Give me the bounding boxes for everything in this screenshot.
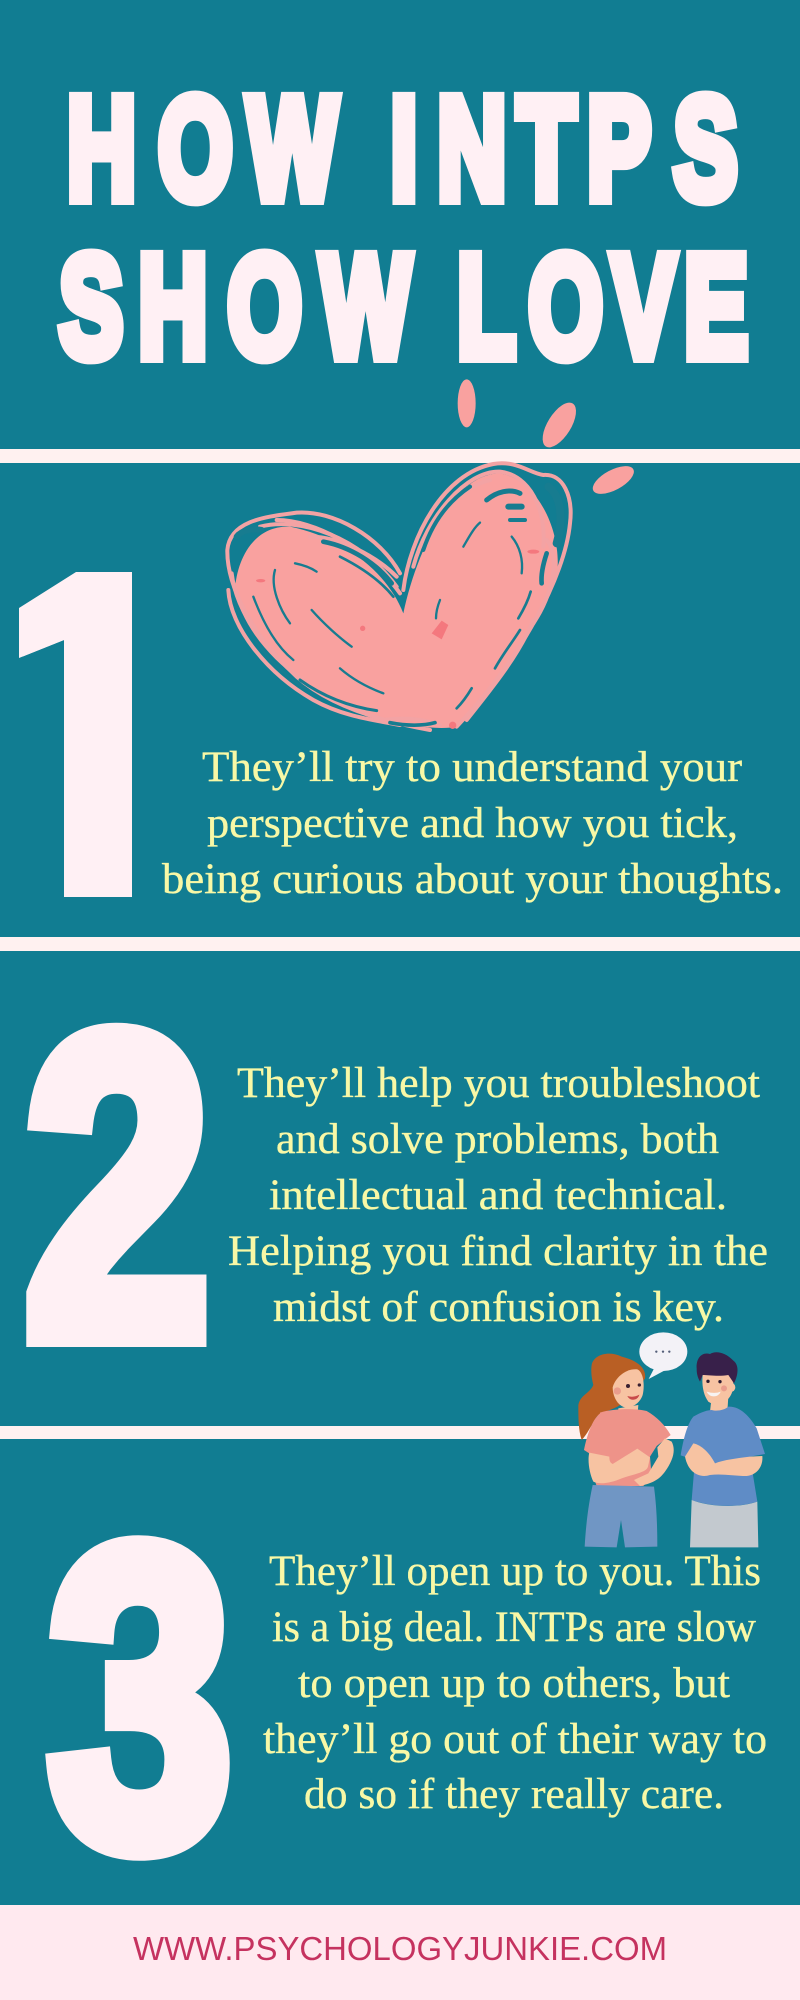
heart teal gaps — [235, 487, 560, 725]
text block 2: They’ll help you troubleshoot — [237, 1060, 760, 1107]
title: HOW INTPS — [67, 68, 737, 229]
text block 3: is a big deal. INTPs are slow — [272, 1604, 756, 1651]
text block 3: they’ll go out of their way to — [263, 1716, 767, 1763]
man — [681, 1352, 765, 1547]
text block 1: perspective and how you tick, — [207, 800, 738, 847]
heart specks — [256, 550, 539, 729]
numeral 2: 2 — [24, 946, 211, 1426]
numeral 1: 1 — [0, 488, 212, 994]
text block 3 — [263, 1548, 767, 1818]
footer url: WWW.PSYCHOLOGYJUNKIE.COM — [133, 1930, 667, 1967]
icon: scribble heart — [227, 379, 638, 730]
heart fill — [235, 473, 558, 728]
heart scribble outlines — [227, 463, 571, 730]
text block 2: intellectual and technical. — [269, 1172, 727, 1219]
text block 3: do so if they really care. — [304, 1771, 724, 1818]
text block 2: midst of confusion is key. — [273, 1284, 724, 1331]
numeral 3: 3 — [48, 1459, 232, 1934]
heart sparks — [458, 379, 638, 499]
text block 1: being curious about your thoughts. — [162, 856, 783, 903]
text block 1: They’ll try to understand your — [202, 744, 742, 791]
text block 1 — [162, 744, 783, 903]
text block 2 — [228, 1060, 768, 1331]
woman — [578, 1354, 674, 1547]
text block 2: Helping you find clarity in the — [228, 1228, 768, 1275]
divider bars — [0, 449, 800, 1439]
text block 3: They’ll open up to you. This — [269, 1548, 761, 1595]
illustration: two people talking — [578, 1332, 765, 1547]
text block 2: and solve problems, both — [276, 1116, 719, 1163]
speech bubble — [639, 1332, 687, 1379]
text block 3: to open up to others, but — [298, 1660, 730, 1707]
title — [59, 68, 748, 387]
footer band — [0, 1905, 800, 2000]
title: SHOW LOVE — [59, 226, 748, 387]
